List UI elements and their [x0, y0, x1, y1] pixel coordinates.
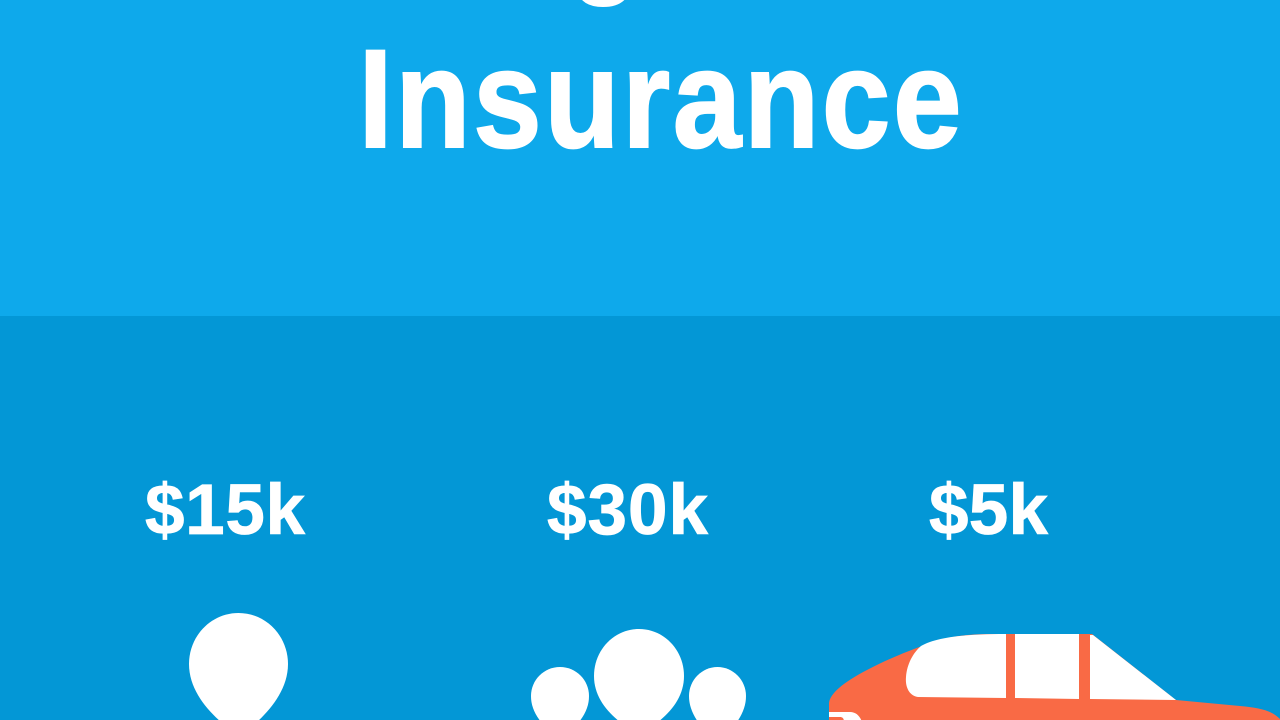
person: right child	[689, 667, 746, 720]
car body	[829, 634, 1280, 720]
icon: single person	[189, 613, 288, 720]
icon: family of three	[531, 629, 746, 720]
panel: coverage amounts background	[0, 316, 1280, 720]
person: left child	[531, 667, 589, 720]
car light	[829, 712, 862, 720]
car front window	[1090, 635, 1176, 700]
icon: car	[829, 634, 1280, 720]
panel: title background	[0, 0, 1280, 316]
amount: $30k: $30k	[547, 471, 708, 550]
car rear window	[906, 634, 1006, 698]
amount: $15k: $15k	[145, 471, 306, 550]
amount: $5k: $5k	[929, 471, 1048, 550]
person: adult	[594, 629, 684, 720]
title: Insurance	[358, 21, 964, 177]
car middle window	[1015, 634, 1079, 699]
